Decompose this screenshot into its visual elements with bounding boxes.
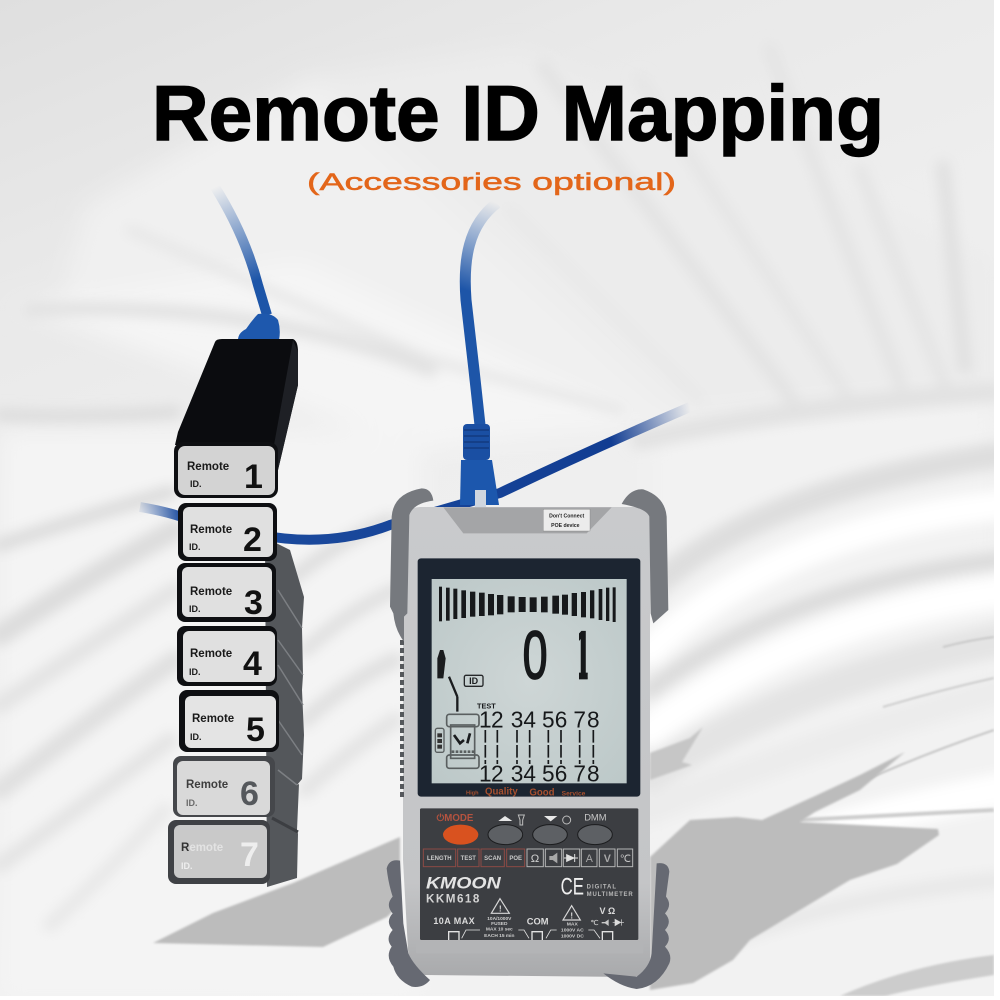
remote 3: Remote <box>190 586 232 598</box>
subtitle: (Accessories optional) <box>307 169 676 196</box>
remote 1: ID. <box>190 479 202 489</box>
lower right bumper <box>603 863 670 989</box>
power MODE label: ⏻MODE <box>437 812 474 824</box>
fuse rating text <box>484 916 515 939</box>
TEST label: TEST <box>477 702 496 711</box>
slogan <box>466 787 586 798</box>
slogan: Good <box>529 787 555 798</box>
lower left bumper <box>387 860 430 987</box>
tester icon <box>447 714 479 768</box>
LCD <box>432 579 627 783</box>
brand logo: KMOON <box>426 874 501 893</box>
remote bodies side faces <box>265 540 304 887</box>
terminal labels: ℃ <box>591 919 599 927</box>
voltage rating text <box>561 922 584 939</box>
pin numbers bottom row: 12345678 <box>479 761 600 787</box>
meter body <box>403 507 650 977</box>
blue cable to meter <box>465 203 497 425</box>
digital multimeter: DIGITAL <box>587 884 616 890</box>
remote 2: ID. <box>189 542 201 552</box>
screen bezel <box>418 558 640 797</box>
remote 5 <box>179 690 279 752</box>
remote 6: ID. <box>186 798 198 808</box>
voltage rating text: MAX <box>567 922 579 928</box>
remote 2: Remote <box>190 524 232 536</box>
lower trim strip <box>416 942 643 953</box>
meter: KKM618 <box>387 488 670 989</box>
function keys <box>423 849 633 867</box>
title: Remote ID Mapping <box>152 69 884 157</box>
remote 4: ID. <box>189 667 201 677</box>
mode button <box>443 825 478 845</box>
function keys: LENGTH <box>427 856 452 862</box>
CE mark: CE <box>561 874 584 901</box>
fuse rating text: EACH 15 min <box>484 933 515 939</box>
remote 4 <box>177 626 277 686</box>
terminal labels: 10A MAX <box>433 916 475 926</box>
slogan: Quality <box>485 787 518 798</box>
control panel <box>420 808 638 940</box>
function keys: TEST <box>461 856 476 862</box>
remote 6: 6 <box>240 775 259 813</box>
ID number readout: 1 <box>570 618 595 694</box>
pin numbers top row: 12345678 <box>479 707 600 733</box>
digital multimeter <box>587 884 633 898</box>
terminal labels: V Ω <box>599 906 615 916</box>
voltage rating text: 1000V AC <box>561 927 584 933</box>
function keys: A <box>586 853 594 865</box>
remote 1: 1 <box>244 458 263 496</box>
remote 2: 2 <box>243 521 262 559</box>
warning triangle left: ! <box>499 904 502 914</box>
DMM button <box>578 813 612 845</box>
blue network cable running behind the meter <box>140 407 690 540</box>
warning triangle left <box>491 899 509 914</box>
warning sticker: POE device <box>551 523 580 529</box>
fuse rating text: FUSED <box>491 921 508 927</box>
warning sticker <box>543 509 590 531</box>
DMM button: DMM <box>584 813 606 823</box>
function keys: V <box>604 853 612 865</box>
voltage rating text: 1000V DC <box>561 933 584 939</box>
ridged left grip <box>400 640 404 800</box>
remote 7: ID. <box>181 861 193 871</box>
remote 4: Remote <box>190 648 232 660</box>
slogan: High <box>466 791 479 797</box>
remote 7: Remote <box>181 842 223 854</box>
function keys: ℃ <box>620 854 631 865</box>
fuse rating text: MAX 10 sec <box>486 927 513 933</box>
RJ45 plug and strain relief <box>460 424 499 508</box>
ID number readout <box>524 630 588 680</box>
remote 1 <box>174 339 298 498</box>
ID tag: ID <box>469 676 479 686</box>
warning sticker: Don't Connect <box>549 514 584 520</box>
slogan: Service <box>562 790 586 797</box>
function keys: POE <box>509 856 522 862</box>
remote 5: Remote <box>192 713 234 725</box>
remote 4: 4 <box>243 645 262 683</box>
remote 5: 5 <box>246 711 265 749</box>
pin links <box>485 730 593 764</box>
function keys: Ω <box>531 853 539 865</box>
battery icon <box>435 728 444 752</box>
remote 2 <box>178 503 277 561</box>
cable icon <box>437 650 446 678</box>
up button and symbol <box>488 815 524 845</box>
warning triangle right: ! <box>570 910 573 920</box>
terminal labels <box>433 906 624 927</box>
blue cable to remote 1 <box>215 187 267 315</box>
remote 3: 3 <box>244 584 263 622</box>
remote 1 plug <box>238 314 280 340</box>
remote 7 <box>168 820 270 884</box>
ID number readout: 0 <box>523 618 548 694</box>
fuse rating text: 10A/1000V <box>487 916 512 922</box>
function keys: SCAN <box>484 856 501 862</box>
ID tag <box>464 675 483 686</box>
top recessed wedge <box>443 507 612 533</box>
remote 7: 7 <box>240 836 259 874</box>
down button and symbol <box>533 816 571 845</box>
remote 3 <box>177 563 276 622</box>
model: KKM618 <box>426 893 480 906</box>
digital multimeter: MULTIMETER <box>587 892 633 898</box>
remote 1: Remote <box>187 461 229 473</box>
upper right bumper <box>622 489 668 623</box>
terminal sockets <box>449 930 613 940</box>
remote 5: ID. <box>190 732 202 742</box>
remote 3: ID. <box>189 604 201 614</box>
upper left bumper <box>390 488 433 642</box>
remote 6: Remote <box>186 779 228 791</box>
signal bars <box>439 587 616 622</box>
remote ID stack <box>168 314 304 887</box>
terminal labels: COM <box>527 917 549 927</box>
warning triangle right <box>563 906 580 920</box>
remote 6 <box>173 756 275 817</box>
